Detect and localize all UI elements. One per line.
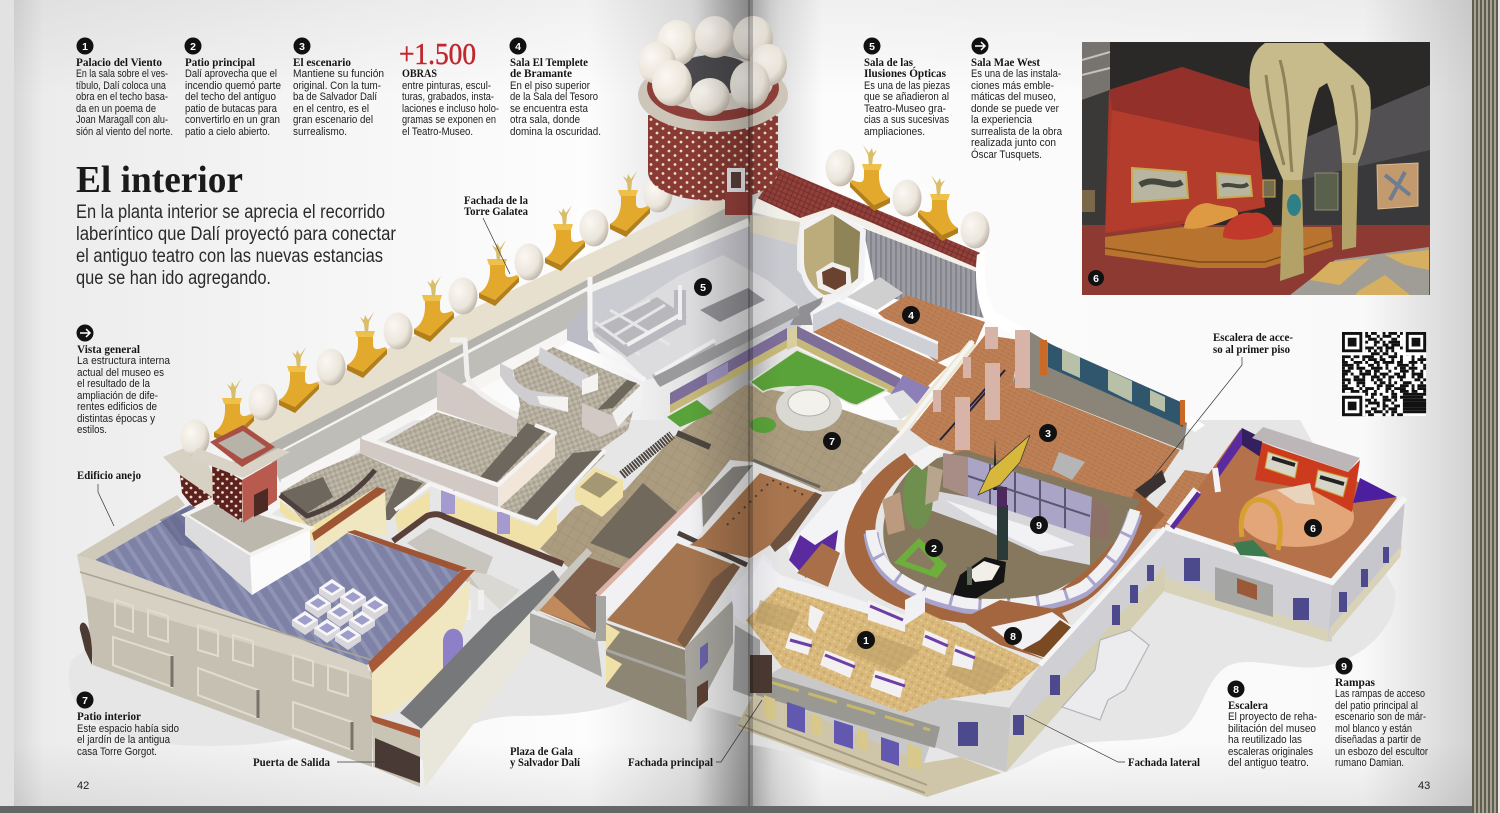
text block 1: Palacio del Viento [76,38,173,138]
label: Fachada de la Torre Galatea: Fachada de la [464,195,528,207]
page numbers [77,780,1430,792]
block: Rampas: mol blanco y están [1335,723,1412,735]
spine shadow [690,0,780,806]
label: Fachada principal: Fachada principal [628,757,713,769]
wing: room 6 [1165,427,1405,642]
balcony benches [785,600,975,698]
purple walls [1217,428,1242,480]
block: Rampas: rumano Damian. [1335,757,1404,769]
gravel yard [400,570,560,730]
text block 2: Patio principal: Dalí aprovecha que el [185,68,277,80]
cadillac car [952,557,1006,602]
block: Vista general [76,324,171,436]
page numbers: 42 [77,780,89,792]
floor shadows [280,380,637,520]
block: Rampas: escenario son de már- [1335,711,1426,723]
label: Fachada principal [628,700,762,769]
label: Plaza de Gala y Salvador Dalí: y Salvador Dalí [510,757,581,769]
text block 1: Palacio del Viento: da en un poema de [76,103,156,115]
left rooms checker floors [280,340,643,620]
text block 2: Patio principal: Patio principal [185,57,255,69]
block: Patio interior: el jardín de la antigua [77,734,171,746]
text block: Sala Mae West: Óscar Tusquets. [971,148,1042,161]
room A [538,557,625,633]
map number markers: 3 [1045,428,1051,440]
text block 3: El escenario [293,38,384,138]
label: Edificio anejo: Edificio anejo [77,470,141,482]
skylights [292,579,388,650]
rear wall left with eggs [214,171,750,489]
photo: Mae West room [1082,42,1430,295]
label: Fachada lateral [1025,715,1200,769]
map number markers: 8 [1010,631,1016,643]
text block: Sala Mae West: Es una de las instala- [971,68,1061,80]
red wall [1105,67,1265,233]
block: Rampas: Las rampas de acceso [1335,688,1425,700]
block: Vista general: actual del museo es [77,367,164,379]
block: Escalera: escaleras originales [1228,746,1313,758]
small tower [163,420,290,523]
intro paragraph: laberíntico que Dalí proyectó para conectar [76,224,397,245]
green square [894,538,947,578]
ground shadow under building [69,420,1396,785]
text block 1: Palacio del Viento: 1 [82,41,88,53]
page numbers: 43 [1418,780,1430,792]
text block 5: Sala de las Ilusiones Ópticas: Ilusiones Ópticas [864,66,946,80]
stat: +1.500 obras: gramas se exponen en [402,114,496,126]
balustrade [670,326,900,413]
metal stairs [1062,630,1149,720]
QR code [1342,332,1426,416]
annex building: rim, roof, facade [77,420,560,787]
text block 4: Sala El Templete: domina la oscuridad. [510,126,601,138]
block: Patio interior: casa Torre Gorgot. [77,746,157,758]
block: Escalera [1228,680,1317,769]
text block 5: Sala de las Ilusiones Ópticas: ampliaciones. [864,126,925,138]
nose and lips sofa [1184,203,1238,229]
stat: +1.500 obras: entre pinturas, escul- [402,80,491,92]
text block 1: Palacio del Viento: sión al viento del norte. [76,126,173,138]
label: Escalera de acceso [1152,332,1293,478]
text block 3: El escenario: Mantiene su función [293,68,384,80]
room 3: hall with painting [863,327,1215,530]
text block 2: Patio principal: del techo del antiguo [185,91,276,103]
intro paragraph: que se han ido agregando. [76,268,271,289]
text block 4: Sala El Templete: 4 [515,41,521,53]
intro paragraph [76,202,397,289]
stat: +1.500 obras: el Teatro-Museo. [402,126,473,138]
block: Rampas [1335,658,1428,769]
map number markers: 4 [908,310,914,322]
auditorium ring and inner court [787,435,1165,624]
text block 2: Patio principal [184,38,281,138]
text block 5: Sala de las Ilusiones Ópticas [864,38,950,138]
text block 5: Sala de las Ilusiones Ópticas: que se añadieron al [864,91,949,103]
map number markers: 6 [1310,523,1316,535]
label: Edificio anejo [77,470,141,526]
text block 1: Palacio del Viento: tíbulo, Dalí coloca una [76,80,167,92]
map number markers: 1 [863,635,869,647]
text block: Sala Mae West: la experiencia [971,114,1033,126]
text block: Sala Mae West [971,38,1063,161]
text block: Sala Mae West: máticas del museo, [971,91,1056,103]
block: Rampas: Rampas [1335,677,1376,689]
room 5: optical illusions [567,255,832,387]
block: Patio interior: 7 [82,695,88,707]
photo: Mae West room: 6 [1093,273,1099,285]
intro paragraph: En la planta interior se aprecia el recorrido [76,202,385,223]
big room walls [360,425,555,507]
block: Patio interior: Este espacio había sido [77,723,179,735]
label: Puerta de Salida [253,757,385,769]
block: Escalera: Escalera [1228,700,1268,712]
paintings [1082,163,1418,212]
stat: +1.500 obras: +1.500 [399,36,476,71]
text block: Sala Mae West: surrealista de la obra [971,126,1063,138]
text block: Sala Mae West: donde se puede ver [971,103,1059,115]
text block 5: Sala de las Ilusiones Ópticas: Es una de las piezas [864,80,950,92]
text block 1: Palacio del Viento: En la sala sobre el ves- [76,68,168,80]
corridor with purple doors [393,450,623,620]
stat: +1.500 obras [399,36,499,138]
map number markers [694,278,1322,649]
text block 4: Sala El Templete: En el piso superior [510,80,590,92]
curved terrace railing [280,470,387,557]
label: Escalera de acceso: Escalera de acce- [1213,332,1293,344]
text block 5: Sala de las Ilusiones Ópticas: 5 [869,41,875,53]
eggs and gold pedestals row [214,171,672,445]
back walls [437,340,643,437]
text block: Sala Mae West: Sala Mae West [971,57,1040,69]
text block 4: Sala El Templete: de la Sala del Tesoro [510,91,598,103]
text block 1: Palacio del Viento: Palacio del Viento [76,57,162,69]
central patio 7 with lawn and fountain [537,326,930,590]
facade [85,590,372,767]
intro paragraph: el antiguo teatro con las nuevas estancias [76,246,383,267]
text block 3: El escenario: original. Con la tum- [293,80,381,92]
hair curtains [1249,43,1371,281]
room B [607,543,740,648]
block: Vista general: ampliación de dife- [77,390,158,402]
front facade of wing [1165,530,1332,642]
text block 2: Patio principal: incendio quemó parte [185,80,281,92]
block: Escalera: El proyecto de reha- [1228,711,1317,723]
label: Fachada de la Torre Galatea [464,195,528,274]
low wall [420,613,530,787]
sculpture column [997,505,1008,560]
text block 1: Palacio del Viento: Joan Maragall con alu- [76,114,168,126]
block: Patio interior [76,692,179,758]
text block 5: Sala de las Ilusiones Ópticas: Teatro-Museo gra- [864,103,946,115]
label: Fachada lateral: Fachada lateral [1128,757,1200,769]
text block 5: Sala de las Ilusiones Ópticas: cias a sus sucesivas [864,114,949,126]
mural [1048,343,1183,427]
map number markers: 9 [1036,520,1042,532]
heading: El interior [76,159,243,201]
lawn [750,350,887,405]
red wall with paintings [1252,427,1360,512]
cream side wall [372,580,470,717]
label: Puerta de Salida: Puerta de Salida [253,757,330,769]
niche with octagonal well [800,210,903,310]
tower with eggs [638,16,788,215]
seating wall [871,513,1135,608]
label: Plaza de Gala y Salvador Dalí: Plaza de Gala [510,746,573,758]
block: Escalera: del antiguo teatro. [1228,757,1309,769]
block: Rampas: diseñadas a partir de [1335,734,1421,746]
text block 3: El escenario: en el centro, es el [293,103,369,115]
lower left central rooms [530,460,822,722]
stat: +1.500 obras: turas, grabados, insta- [402,91,494,103]
text block 4: Sala El Templete [510,38,601,138]
text block 2: Patio principal: convertirlo en un gran [185,114,280,126]
front facade [736,655,1011,797]
block: Escalera: ha reutilizado las [1228,734,1302,746]
block: Rampas: un esbozo del escultor [1335,746,1428,758]
map number markers: 7 [829,436,835,448]
label: Fachada de la Torre Galatea: Torre Galatea [464,206,528,218]
block: Escalera: 8 [1233,684,1239,696]
label: Escalera de acceso: so al primer piso [1213,344,1290,356]
text block 3: El escenario: gran escenario del [293,114,373,126]
map number markers: 2 [931,543,937,555]
window wall [943,453,968,497]
wing windows and door [1184,547,1389,620]
label: Plaza de Gala y Salvador Dalí [510,746,581,769]
text block 3: El escenario: ba de Salvador Dalí [293,91,377,103]
room C [690,473,822,558]
ramps [930,490,1090,565]
text block 2: Patio principal: 2 [190,41,196,53]
block: Vista general: estilos. [77,424,107,436]
block: Escalera: bilitación del museo [1228,723,1316,735]
pink-topped wall [597,495,702,617]
fountain [776,385,842,431]
block: Rampas: del patio principal al [1335,700,1418,712]
stat: +1.500 obras: OBRAS [402,68,437,80]
text block 4: Sala El Templete: Sala El Templete [510,57,588,69]
block: Patio interior: Patio interior [77,711,141,723]
patio 1 with staircase 8 [745,558,1080,713]
text block: Sala Mae West: ciones más emble- [971,80,1054,92]
text block: Sala Mae West: realizada junto con [971,137,1056,149]
right rear wall with red tiles [750,145,1205,432]
text block 3: El escenario: 3 [299,41,305,53]
eggs on right wall [826,145,990,248]
text block 5: Sala de las Ilusiones Ópticas: Sala de las [864,57,913,69]
text block 2: Patio principal: patio a cielo abierto. [185,126,270,138]
text block 1: Palacio del Viento: obra en el techo basa- [76,91,168,103]
text block 3: El escenario: surrealismo. [293,126,347,138]
text block 3: El escenario: El escenario [293,57,351,69]
text block 2: Patio principal: patio de butacas para [185,103,278,115]
text block 4: Sala El Templete: otra sala, donde [510,114,580,126]
white box [185,500,310,595]
tiled roof edge [368,570,475,673]
block: Vista general: distintas épocas y [77,413,155,425]
side facade [1000,528,1165,772]
block: Rampas: 9 [1341,661,1347,673]
stat: +1.500 obras: laciones e incluso holo- [402,103,499,115]
text block 4: Sala El Templete: de Bramante [510,68,572,80]
text block 4: Sala El Templete: se encuentra esta [510,103,589,115]
pink pillars [933,327,1030,450]
block: Vista general: el resultado de la [77,378,151,390]
block: Vista general: La estructura interna [77,355,171,367]
exit gate [370,715,420,787]
block: Vista general: Vista general [77,344,140,356]
map number markers: 5 [700,282,706,294]
tree [903,465,933,529]
wooden stage [1105,227,1333,268]
checker floor [1290,247,1429,295]
block: Vista general: rentes edificios de [77,401,157,413]
room 4: brick floors [813,295,985,387]
